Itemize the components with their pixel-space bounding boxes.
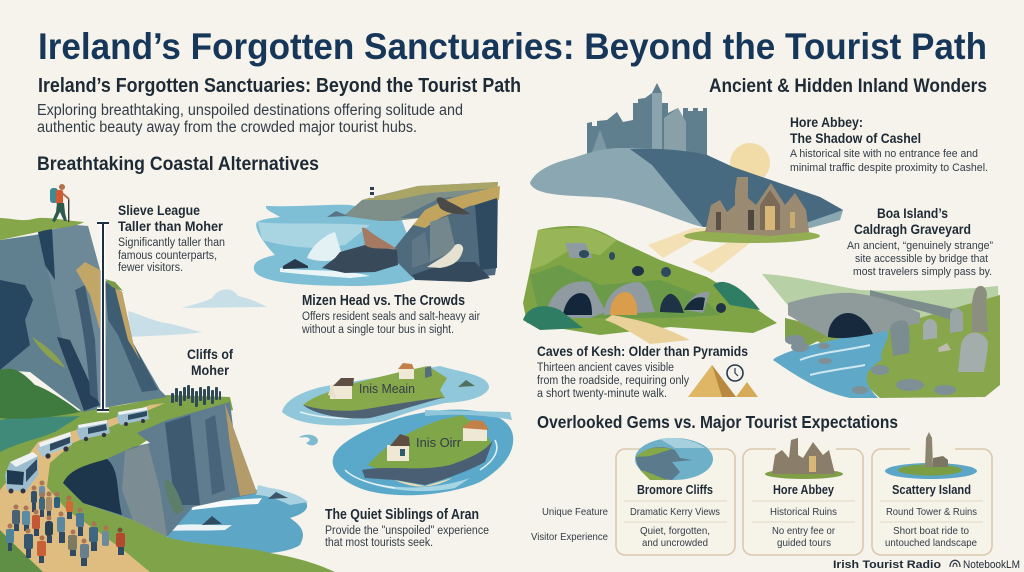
- subtitle heading: Ireland’s Forgotten Sanctuaries: Beyond the Tourist Path: [38, 75, 521, 97]
- swirl: [299, 435, 318, 445]
- bus 4: [117, 407, 149, 426]
- illustration: sun: [730, 143, 770, 183]
- text: Mizen Head: Mizen Head vs. The Crowds: [302, 293, 465, 309]
- illustration: tour buses: [5, 407, 149, 494]
- icon: hiker: [50, 184, 69, 222]
- far headland: [345, 182, 498, 221]
- far parapet: [870, 290, 957, 322]
- text: Boa Island: site accessible by bridge that: [855, 253, 988, 265]
- card: Hore Abbey: guided tours: [777, 537, 831, 549]
- text: Cliffs of Moher label: Moher: [191, 363, 230, 378]
- seal dark top: [436, 197, 470, 214]
- illustration: Aran islands: [282, 363, 513, 495]
- title: Ireland’s Forgotten Sanctuaries: Beyond the Tourist Path: [38, 26, 987, 67]
- card: Bromore Cliffs: Dramatic Kerry Views: [630, 506, 720, 518]
- text: Boa Island: [847, 206, 993, 278]
- path: [605, 315, 690, 344]
- label: Inis Meain: Inis Meain: [359, 381, 415, 396]
- text: Boa Island: Boa Island’s: [877, 206, 948, 221]
- text: Quiet Siblings of Aran: The Quiet Siblings of Aran: [325, 507, 479, 523]
- text: Quiet Siblings of Aran: [325, 507, 489, 549]
- cottage: [387, 434, 410, 461]
- intro text: Exploring breathtaking, unspoiled destinations offering solitude and: [37, 102, 463, 119]
- river: [773, 327, 888, 398]
- text: Caves of Kesh: [537, 344, 748, 400]
- text: Caves of Kesh: from the roadside, requiring only: [537, 375, 689, 387]
- card: Bromore Cliffs: and uncrowded: [642, 537, 708, 549]
- water: Inis Oirr: [333, 410, 513, 495]
- text: Slieve League: Slieve League: [118, 203, 200, 218]
- cave openings: [545, 243, 726, 318]
- lighthouse: [370, 184, 374, 198]
- card: Hore Abbey: Historical Ruins: [770, 506, 837, 518]
- water: [254, 205, 421, 286]
- seal brown middle: [362, 228, 397, 249]
- text: Caves of Kesh: a short twenty-minute walk.: [537, 388, 667, 400]
- icon: height measure line: [97, 223, 109, 410]
- text: Boa Island: most travelers simply pass by.: [853, 266, 992, 278]
- text: Quiet Siblings of Aran: Provide the "unspoiled" experience: [325, 525, 489, 537]
- bus 2: [38, 432, 72, 459]
- text: Mizen Head: Offers resident seals and salt-heavy air: [302, 311, 480, 323]
- illustration: lower cliffs of Moher: [63, 402, 257, 537]
- cottage: [462, 420, 489, 441]
- text: Hore Abbey: [790, 115, 988, 174]
- card: Hore Abbey: Hore Abbey: [773, 483, 834, 497]
- label: Inis Oirr: Inis Oirr: [416, 435, 462, 450]
- rock stack: [393, 195, 498, 281]
- text: Quiet Siblings of Aran: that most tourists seek.: [325, 537, 433, 549]
- text: Hore Abbey: Hore Abbey:: [790, 115, 863, 130]
- illustration: crowd at Cliffs of Moher: [171, 385, 221, 407]
- section heading: coastal: Breathtaking Coastal Alternatives: [37, 154, 319, 175]
- icon: abbey ruin: [765, 438, 843, 479]
- text: Caves of Kesh: Thirteen ancient caves visible: [537, 362, 674, 374]
- illustration: Mizen Head seals and rocks: [254, 182, 500, 286]
- card: Scattery Island: Short boat ride to: [893, 525, 969, 537]
- card: Hore Abbey: No entry fee or: [772, 525, 835, 537]
- illustration: road: [0, 403, 165, 572]
- text: Hore Abbey: minimal traffic despite proximity to Cashel.: [790, 162, 988, 174]
- text: Slieve League: [118, 203, 225, 274]
- card: Bromore Cliffs: [616, 438, 735, 555]
- text: Hore Abbey: The Shadow of Cashel: [790, 131, 921, 146]
- illustration: Caves of Kesh hill: [523, 226, 777, 344]
- illustration: tourist crowd on road: [6, 480, 125, 566]
- gravestones: [890, 308, 988, 372]
- island: Inis Oirr: [368, 415, 492, 478]
- illustration: light beams: [648, 228, 750, 273]
- text: Mizen Head: without a single tour bus in sight.: [301, 324, 454, 336]
- illustration: Caldragh graveyard and bridge: [762, 274, 1000, 398]
- row label: Unique Feature: Unique Feature: [542, 506, 608, 518]
- land: [785, 295, 1000, 398]
- text: Mizen Head: [301, 293, 480, 336]
- intro text: [37, 102, 463, 136]
- text: Boa Island: An ancient, “genuinely strange”: [847, 240, 993, 252]
- card: Bromore Cliffs: Bromore Cliffs: [637, 483, 713, 497]
- bus 1: [5, 452, 38, 494]
- bridge: [788, 293, 920, 337]
- section heading: inland: Ancient & Hidden Inland Wonders: [709, 76, 987, 97]
- illustration: Hore Abbey ruin: [684, 177, 820, 243]
- cottage: [398, 363, 414, 379]
- illustration: Slieve League cliff: [0, 218, 167, 419]
- card: Hore Abbey: [743, 438, 863, 555]
- island: Inis Meain: [303, 366, 447, 417]
- text: Slieve League: Taller than Moher: [118, 219, 224, 234]
- row label: Visitor Experience: Visitor Experience: [531, 531, 608, 543]
- illustration: sea below cliffs: [165, 485, 308, 554]
- illustration: clouds: [128, 289, 267, 337]
- text: Hore Abbey: A historical site with no entrance fee and: [790, 148, 978, 160]
- card: Scattery Island: Scattery Island: [892, 483, 971, 497]
- illustration: Rock of Cashel hill and castle: [530, 83, 843, 228]
- text: Boa Island: Caldragh Graveyard: [854, 222, 971, 237]
- card: Bromore Cliffs: Quiet, forgotten,: [640, 525, 710, 537]
- cottage: [328, 378, 354, 399]
- icon: NotebookLM: [950, 560, 960, 567]
- text: Cliffs of Moher label: [187, 347, 233, 378]
- section heading: comparison: Overlooked Gems vs. Major Tourist Expectations: [537, 412, 898, 432]
- seal white: [427, 244, 463, 268]
- icon: pyramids and clock: [688, 365, 758, 397]
- rock: [458, 380, 475, 387]
- text: Slieve League: famous counterparts,: [118, 250, 217, 262]
- text: Slieve League: Significantly taller than: [118, 237, 225, 249]
- text: Slieve League: fewer visitors.: [118, 262, 183, 274]
- footer credit: Irish Tourist Radio: [833, 559, 941, 571]
- bus 3: [77, 420, 110, 441]
- card: Scattery Island: untouched landscape: [885, 537, 977, 549]
- text: Cliffs of Moher label: Cliffs of: [187, 347, 233, 362]
- footer credit: NotebookLM: [963, 559, 1020, 571]
- footer credit: [833, 559, 1020, 571]
- rocks: [785, 335, 956, 395]
- text: Caves of Kesh: Caves of Kesh: Older than Pyramids: [537, 344, 748, 359]
- icon: Bromore Cliffs: [635, 438, 713, 480]
- intro text: authentic beauty away from the crowded major tourist hubs.: [37, 119, 417, 136]
- card: Scattery Island: [872, 432, 992, 555]
- card: Scattery Island: Round Tower & Ruins: [886, 506, 977, 518]
- illustration: grass land: [0, 395, 335, 572]
- icon: round tower island: [885, 432, 977, 479]
- statue: [972, 286, 988, 332]
- water: Inis Meain: [282, 366, 489, 425]
